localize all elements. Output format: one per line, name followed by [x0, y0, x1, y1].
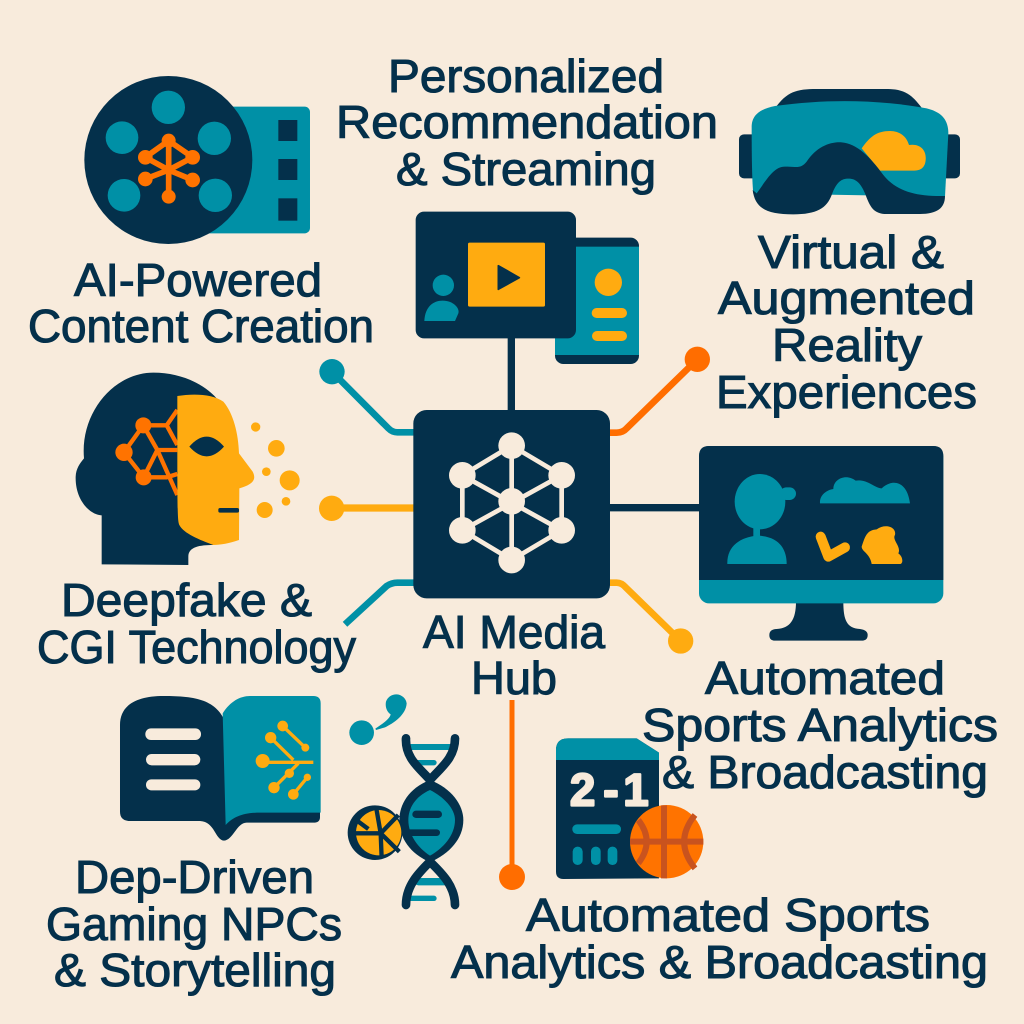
icon: speech marks — [349, 694, 407, 745]
icon: scoreboard and basketball: - — [603, 764, 618, 815]
label: Virtual & Augmented Reality Experiences: Experiences — [716, 366, 977, 418]
label: Automated Sports Analytics & Broadcasting (bottom): Automated Sports — [526, 889, 930, 941]
icon: VR headset — [739, 89, 960, 214]
label: Automated Sports Analytics & Broadcasting (right): Sports Analytics — [642, 699, 998, 751]
label: Automated Sports Analytics & Broadcasting (bottom) — [451, 889, 988, 988]
icon: DNA helix with ball — [348, 738, 463, 905]
label: Virtual & Augmented Reality Experiences: Reality — [772, 319, 922, 371]
label: AI-Powered Content Creation: AI-Powered — [74, 254, 322, 306]
icon: deepfake head — [76, 373, 300, 565]
label: Automated Sports Analytics & Broadcasting (right): Automated — [705, 652, 945, 704]
label: Automated Sports Analytics & Broadcasting (bottom): Analytics & Broadcasting — [451, 936, 988, 988]
label: AI-Powered Content Creation — [28, 254, 374, 352]
label: Automated Sports Analytics & Broadcasting (right) — [642, 652, 998, 798]
icon: scoreboard and basketball — [556, 738, 703, 879]
label: AI-Powered Content Creation: Content Creation — [28, 300, 374, 352]
heading: AI Media Hub: Hub — [471, 652, 557, 704]
label: Personalized Recommendation & Streaming: Recommendation — [336, 96, 718, 148]
label: Deepfake & CGI Technology: Deepfake & — [61, 574, 312, 626]
icon: film reel — [84, 76, 310, 244]
label: Virtual & Augmented Reality Experiences: Augmented — [718, 272, 975, 324]
central hub icon — [413, 410, 610, 598]
icon: sports monitor — [699, 446, 943, 641]
connector: bottom orange line — [499, 700, 525, 890]
label: Dep-Driven Gaming NPCs & Storytelling: & Storytelling — [54, 944, 336, 996]
label: Virtual & Augmented Reality Experiences: Virtual & — [758, 226, 944, 278]
label: Personalized Recommendation & Streaming — [336, 50, 718, 195]
label: Dep-Driven Gaming NPCs & Storytelling: Dep-Driven — [75, 851, 314, 903]
connectors: hub spokes — [319, 337, 710, 654]
label: Personalized Recommendation & Streaming: Personalized — [388, 50, 664, 102]
icon: open book speech bubble — [120, 696, 321, 841]
heading: AI Media Hub — [423, 606, 605, 704]
label: Virtual & Augmented Reality Experiences — [716, 226, 977, 418]
icon: scoreboard and basketball: 2 — [570, 764, 595, 815]
heading: AI Media Hub: AI Media — [423, 606, 605, 658]
label: Deepfake & CGI Technology: CGI Technology — [37, 621, 356, 673]
icon: scoreboard and basketball: 1 — [623, 764, 649, 815]
label: Dep-Driven Gaming NPCs & Storytelling — [46, 851, 342, 996]
label: Dep-Driven Gaming NPCs & Storytelling: Gaming NPCs — [46, 898, 342, 950]
label: Personalized Recommendation & Streaming: & Streaming — [396, 143, 656, 195]
icon: streaming screens — [416, 212, 639, 364]
label: Deepfake & CGI Technology — [37, 574, 356, 673]
label: Automated Sports Analytics & Broadcasting (right): & Broadcasting — [662, 746, 988, 798]
